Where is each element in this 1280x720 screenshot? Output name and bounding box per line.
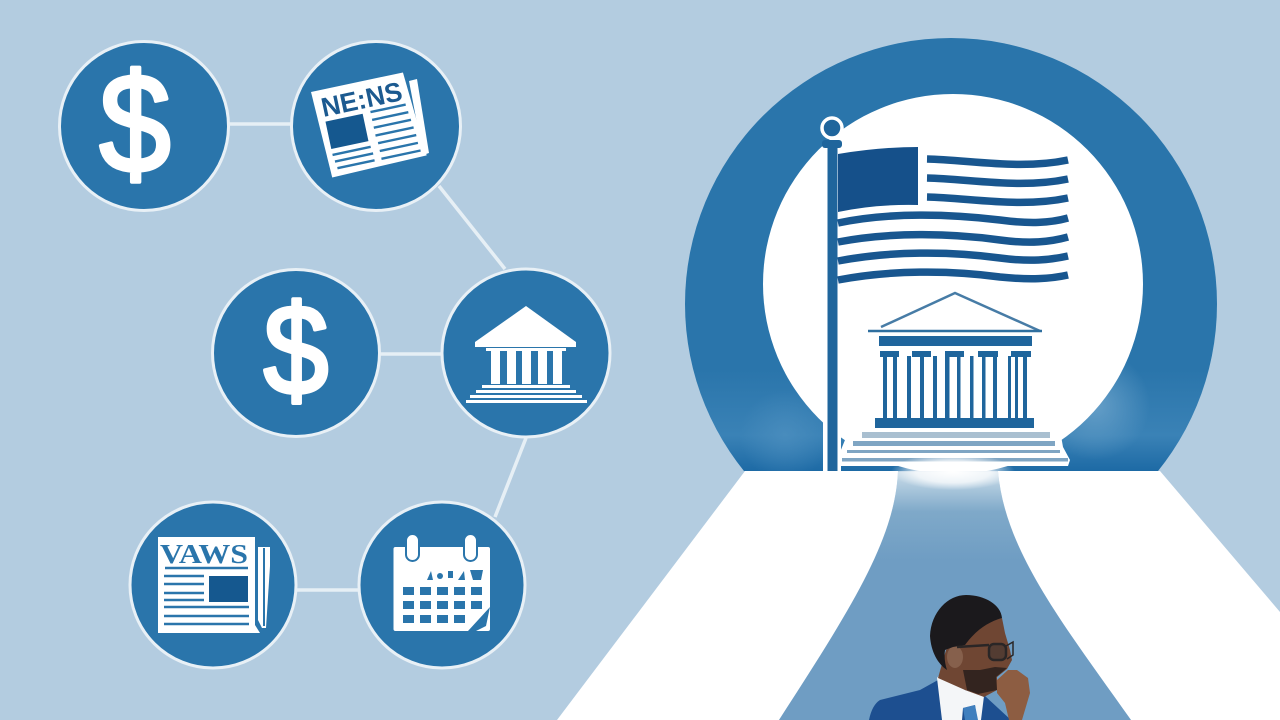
road: right white band xyxy=(998,471,1280,720)
icon: flat newspaper: VAWS xyxy=(160,539,248,569)
icon: dollar coin top: $ xyxy=(99,44,171,202)
road: central blue path xyxy=(779,472,1131,720)
arch ring xyxy=(685,38,1217,471)
icon: tilted newspaper: NE:NS xyxy=(318,76,405,123)
road: left white band xyxy=(557,471,898,720)
icon: government building xyxy=(842,293,1068,462)
connector lines xyxy=(228,124,526,590)
icon: calendar xyxy=(359,502,525,668)
icon: dollar coin middle xyxy=(212,270,380,436)
icon: flat newspaper xyxy=(130,502,296,668)
icon: dollar coin top xyxy=(60,42,228,210)
icon: bank building xyxy=(442,269,610,437)
icon: dollar coin middle: $ xyxy=(264,278,328,421)
panel: archway with flag and government building xyxy=(557,38,1280,720)
icon: tilted newspaper xyxy=(292,42,460,210)
light glow at doorway xyxy=(891,454,1015,490)
panel: network of connected icons xyxy=(60,42,610,668)
person thinking xyxy=(869,595,1030,720)
icon: american flag xyxy=(822,118,1068,471)
